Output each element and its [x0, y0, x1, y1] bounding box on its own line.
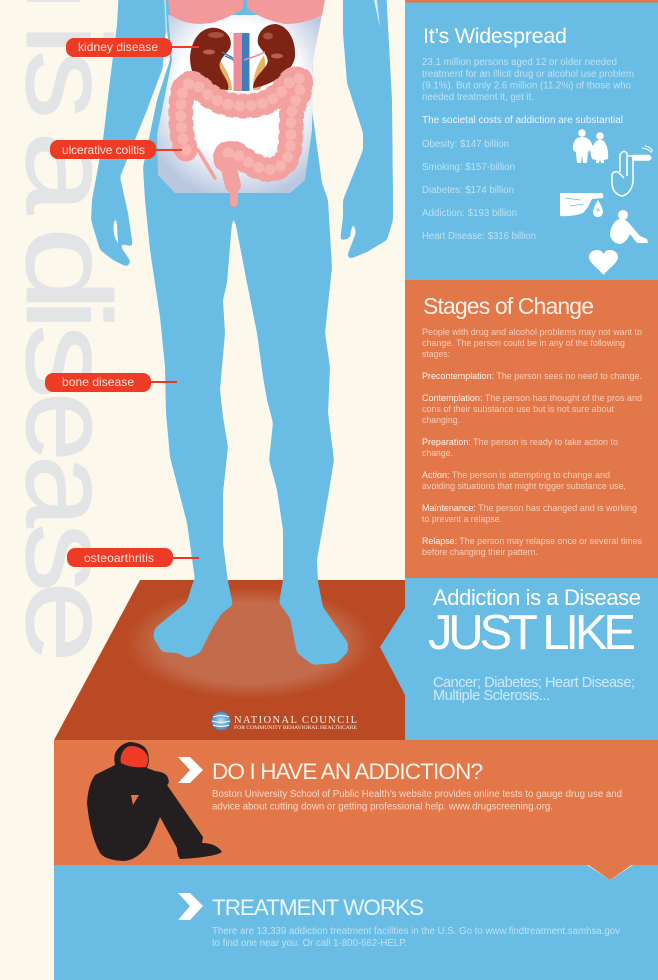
stages text: Maintenance: The person has changed and is working [422, 503, 637, 514]
vertical background title: a [1, 455, 136, 528]
label: bone disease [45, 373, 177, 392]
intro text: needed treatment it, get it. [422, 92, 534, 103]
vertical background title [1, 0, 136, 663]
heading: do I have an addiction: DO I HAVE AN ADDICTION? [212, 759, 483, 784]
heading: It’s Widespread [423, 24, 567, 48]
panel: treatment works [54, 865, 658, 980]
vertical background title: e [2, 392, 136, 461]
lungs [168, 0, 325, 24]
stages text: Action: The person is attempting to change and [422, 470, 610, 481]
text: addiction advice [212, 789, 622, 812]
stages text: before changing their pattern. [422, 547, 538, 558]
vertical background title: s [1, 50, 135, 119]
stages text: Relapse: The person may relapse once or several times [422, 536, 642, 547]
stages text: People with drug and alcohol problems may not want to [422, 327, 642, 338]
panel: it's widespread [405, 0, 658, 280]
text: addiction advice: Boston University School of Public Health’s website provides online tests to gauge drug use and [212, 789, 622, 800]
disease list: Cancer; Diabetes; Heart Disease; [433, 675, 635, 691]
cost list [422, 139, 536, 242]
vertical background title: d [1, 227, 135, 312]
text: treatment info: There are 13,339 addiction treatment facilities in the U.S. Go to www.findtreatment.samhsa.gov [212, 926, 620, 937]
panel: do I have an addiction [54, 740, 658, 880]
thumb gap [114, 220, 118, 243]
label: bone disease: bone disease [62, 375, 134, 389]
stages text: avoiding situations that might trigger substance use, [422, 481, 626, 492]
logo: National Council: FOR COMMUNITY BEHAVIORAL HEALTHCARE [234, 725, 358, 731]
brain [121, 746, 148, 767]
icon: seated figure [87, 742, 222, 861]
colon [181, 78, 301, 203]
vertical background title: s [1, 523, 135, 592]
cost list: Addiction: $193 billion [422, 208, 517, 219]
vertical background title: i [1, 23, 136, 56]
abdomen cavity [157, 15, 322, 193]
label: osteoarthritis: osteoarthritis [84, 551, 154, 565]
icon: sitting person [610, 210, 648, 244]
arrow: addiction heading [178, 757, 203, 783]
cost list: Heart Disease: $316 billion [422, 231, 536, 242]
text: treatment info [212, 926, 620, 949]
intro text: treatment for an illicit drug or alcohol use problem [422, 69, 634, 80]
cost list: Diabetes: $174 billion [422, 185, 514, 196]
label: ulcerative colitis [50, 140, 182, 159]
human body figure [91, 0, 393, 665]
label: osteoarthritis [67, 548, 199, 567]
vertical background title: e [1, 581, 136, 663]
disease list: Multiple Sclerosis... [433, 688, 550, 704]
vertical background title: i [1, 298, 136, 331]
intro text [422, 57, 634, 103]
label: kidney disease: kidney disease [78, 40, 158, 54]
cost list: Smoking: $157-billion [422, 162, 515, 173]
stages text [422, 327, 642, 558]
stages text: cons of their substance use but is not sure about [422, 404, 614, 415]
heading: Stages of Change [423, 293, 594, 319]
subheading: The societal costs of addiction are substantial [422, 115, 623, 126]
stages text: Preparation: The person is ready to take action to [422, 437, 618, 448]
heading: Addiction is a Disease [433, 585, 641, 610]
logo: National Council [212, 712, 358, 731]
kidneys and vessels [190, 24, 295, 91]
stages text: Contemplation: The person has thought of the pros and [422, 393, 642, 404]
right arm [340, 0, 393, 259]
label: kidney disease [66, 38, 199, 57]
heading: treatment works: TREATMENT WORKS [212, 895, 424, 920]
icon: heart [589, 250, 618, 275]
text: treatment info: to find one near you. Or call 1-800-662-HELP. [212, 938, 407, 949]
vertical background title: s [1, 324, 136, 399]
torso and legs [143, 0, 348, 665]
icon: smoking hand [612, 146, 652, 196]
icon: obese couple [573, 129, 608, 163]
arrow: treatment heading [178, 893, 203, 920]
stages text: Precontemplation: The person sees no need to change. [422, 371, 642, 382]
text: addiction advice: advice about cutting down or getting professional help. www.drugscreening.org. [212, 802, 553, 812]
panel: addiction is a disease [380, 578, 658, 740]
logo: National Council: NATIONAL COUNCIL [234, 715, 357, 726]
panel: stages of change [405, 280, 658, 578]
intro text: 23.1 million persons aged 12 or older needed [422, 57, 617, 68]
label: ulcerative colitis: ulcerative colitis [62, 143, 145, 157]
stages text: changing. [422, 415, 460, 426]
cost list: Obesity: $147 billion [422, 139, 509, 150]
stages text: change. The person could be in any of the following [422, 338, 625, 349]
stages text: to prevent a relapse. [422, 514, 502, 525]
disease list [433, 675, 635, 704]
stages text: change. [422, 448, 453, 459]
stages text: stages: [422, 349, 450, 360]
icon: pointing hand with drop [560, 193, 603, 217]
vertical background title: a [1, 131, 136, 215]
floor panel [54, 580, 405, 740]
left arm [91, 0, 165, 267]
just like: JUST LIKE [428, 606, 636, 660]
arm highlight [374, 0, 380, 28]
intro text: (9.1%). But only 2.6 million (11.2%) of those who [422, 80, 631, 92]
